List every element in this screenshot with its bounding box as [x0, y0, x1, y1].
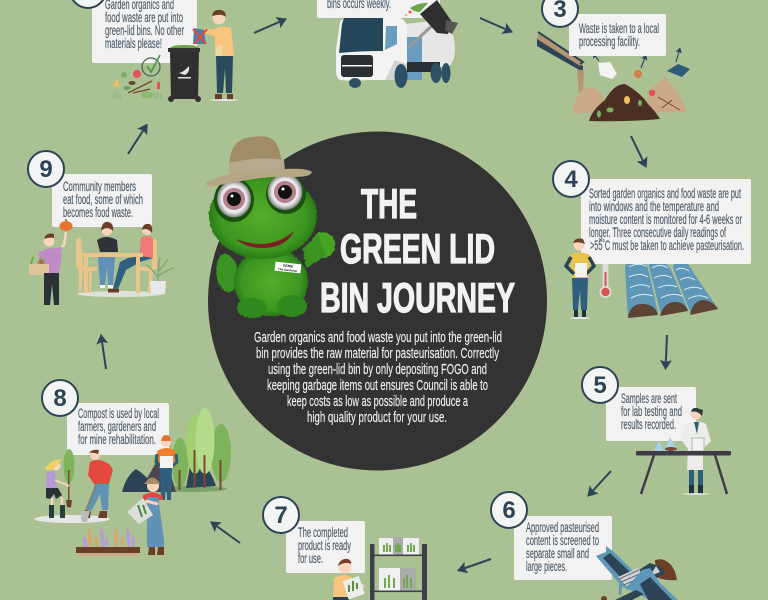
- title: GREEN LID: [340, 225, 495, 272]
- garden organics and food scraps: [113, 70, 161, 99]
- icon: accepted items check: [142, 55, 160, 76]
- step 8 text box: farmers, gardeners and: [78, 419, 156, 434]
- step 6 number: 6: [502, 497, 516, 524]
- step 5: [582, 367, 731, 495]
- step 3: [537, 0, 690, 121]
- step 8 number: 8: [53, 385, 67, 412]
- step 9 text box: becomes food waste.: [63, 205, 133, 220]
- step 5 text box: for lab testing and: [621, 404, 682, 419]
- title: BIN JOURNEY: [320, 274, 515, 321]
- arrow 5 to 6: [588, 471, 611, 496]
- step 8 text box: [67, 403, 169, 455]
- step 6: [491, 492, 678, 600]
- icon: screening machine: [596, 546, 678, 600]
- panel: central dark circle: [208, 132, 547, 470]
- worker in hi-vis: [156, 435, 177, 500]
- step 9 number: 9: [39, 156, 53, 183]
- icon: chairs: [76, 238, 157, 293]
- step 9 number: [28, 151, 64, 187]
- person's upper body over box: [566, 238, 594, 278]
- step 7 text box: product is ready: [298, 538, 351, 553]
- step 3 text box: [569, 14, 666, 56]
- step 7 number: [263, 497, 299, 533]
- mascot eyes: [214, 174, 306, 222]
- step 5 text box: [606, 387, 696, 441]
- step 9 text box: [52, 174, 152, 227]
- ground shadow: [77, 291, 163, 297]
- step 9 text box: eat food, some of which: [63, 192, 143, 207]
- icon: thermometer: [600, 259, 612, 298]
- step 8 text box: for mine rehabilitation.: [78, 432, 156, 447]
- step 4 number: 4: [564, 166, 578, 193]
- mascot body: [209, 173, 335, 318]
- step 5 number: 5: [593, 372, 607, 399]
- icon: green-lid bin: [168, 45, 201, 102]
- step 5 text box: Samples are sent: [621, 391, 677, 406]
- step 8 number: [42, 380, 78, 416]
- intro text block: keep costs as low as possible and produce a: [287, 394, 469, 410]
- step 6 text box: content is screened to: [526, 533, 599, 548]
- step 1 text box: green-lid bins. No other: [105, 23, 184, 38]
- step 1 text box: materials please!: [105, 36, 162, 51]
- icon: windrows: [625, 258, 718, 318]
- arrow 6 to 7: [458, 559, 491, 570]
- seated people: [97, 222, 153, 292]
- intro text block: Garden organics and food waste you put into the green-lid: [254, 330, 502, 346]
- step 7 text box: for use.: [298, 551, 323, 566]
- arrow 9 to 1: [128, 124, 147, 154]
- step 2 text box: [317, 0, 440, 18]
- step 6 text box: large pieces.: [526, 559, 567, 574]
- step 3 text box: Waste is taken to a local: [579, 21, 659, 36]
- icon: rejected contaminants: [593, 48, 690, 79]
- person putting waste in bin: [193, 10, 238, 101]
- mascot mouth: [236, 231, 294, 248]
- person holding product: [333, 559, 365, 600]
- icon: collection truck: [336, 18, 455, 88]
- step 8: [34, 380, 231, 556]
- step 6 text box: Approved pasteurised: [526, 520, 599, 535]
- title: THE: [361, 180, 417, 227]
- icon: sorted compost piles: [572, 78, 687, 121]
- step 6 text box: separate small and: [526, 546, 589, 561]
- title: [320, 180, 515, 321]
- icon: hills and trees: [122, 408, 231, 492]
- woman with pumpkin and produce box: [29, 219, 72, 305]
- intro text block: bin provides the raw material for pasteurisation. Correctly: [256, 346, 499, 362]
- arrow 3 to 4: [631, 136, 646, 167]
- step 6 number: [491, 492, 527, 528]
- step 9 text box: Community members: [63, 179, 136, 194]
- step 7 text box: The completed: [298, 525, 348, 540]
- step 7 number: 7: [274, 502, 288, 529]
- farmer with bag: [127, 478, 164, 555]
- step 5 text box: results recorded.: [621, 417, 676, 432]
- intro text block: using the green-lid bin by only depositing FOGO and: [268, 362, 487, 378]
- mascot: [206, 136, 335, 318]
- step 3 text box: processing facility.: [579, 34, 640, 49]
- arrow 8 to 9: [101, 335, 106, 369]
- mascot name tag: GENIE: [283, 263, 294, 269]
- step 6 text box: [514, 516, 612, 580]
- icon: conveyor: [537, 32, 584, 95]
- step 7 text box: [286, 521, 365, 573]
- step 8 text box: Compost is used by local: [78, 406, 159, 421]
- step 1: [70, 0, 238, 102]
- step 2: [317, 0, 458, 88]
- planting ground: [34, 515, 110, 523]
- icon: sapling: [64, 449, 74, 508]
- arrow 4 to 5: [666, 335, 667, 369]
- mascot hat: [206, 136, 312, 186]
- step 7: [263, 497, 427, 600]
- step 4 number: [553, 161, 589, 197]
- arrow 7 to 8: [211, 522, 240, 543]
- intro text block: high quality product for your use.: [307, 410, 447, 426]
- step 1 text box: [92, 0, 197, 63]
- man digging: [81, 450, 113, 522]
- intro text block: [254, 330, 502, 426]
- woman planting: [45, 459, 69, 518]
- icon: scientist: [680, 408, 711, 495]
- step 4: [553, 161, 751, 319]
- arrow 2 to 3: [480, 18, 512, 32]
- icon: lifted bin: [405, 0, 458, 48]
- step 4 text box: [581, 179, 751, 264]
- person with clipboard: [570, 278, 590, 319]
- step 5 number: [582, 367, 618, 403]
- icon: lab table and flasks: [636, 437, 731, 494]
- icon: shelving with product bags: [370, 537, 427, 600]
- intro text block: keeping garbage items out ensures Council is able to: [267, 378, 488, 394]
- mascot name tag: [275, 262, 301, 273]
- step 1 number: [70, 0, 106, 8]
- step 1 text box: food waste are put into: [105, 10, 183, 25]
- step 9: [28, 151, 174, 305]
- flower bed: [76, 528, 140, 556]
- mascot name tag: The Gardener: [278, 267, 298, 273]
- step 3 number: [542, 0, 578, 27]
- icon: potted plant: [146, 257, 174, 294]
- arrow 1 to 2: [254, 19, 286, 33]
- icon: table: [82, 253, 143, 293]
